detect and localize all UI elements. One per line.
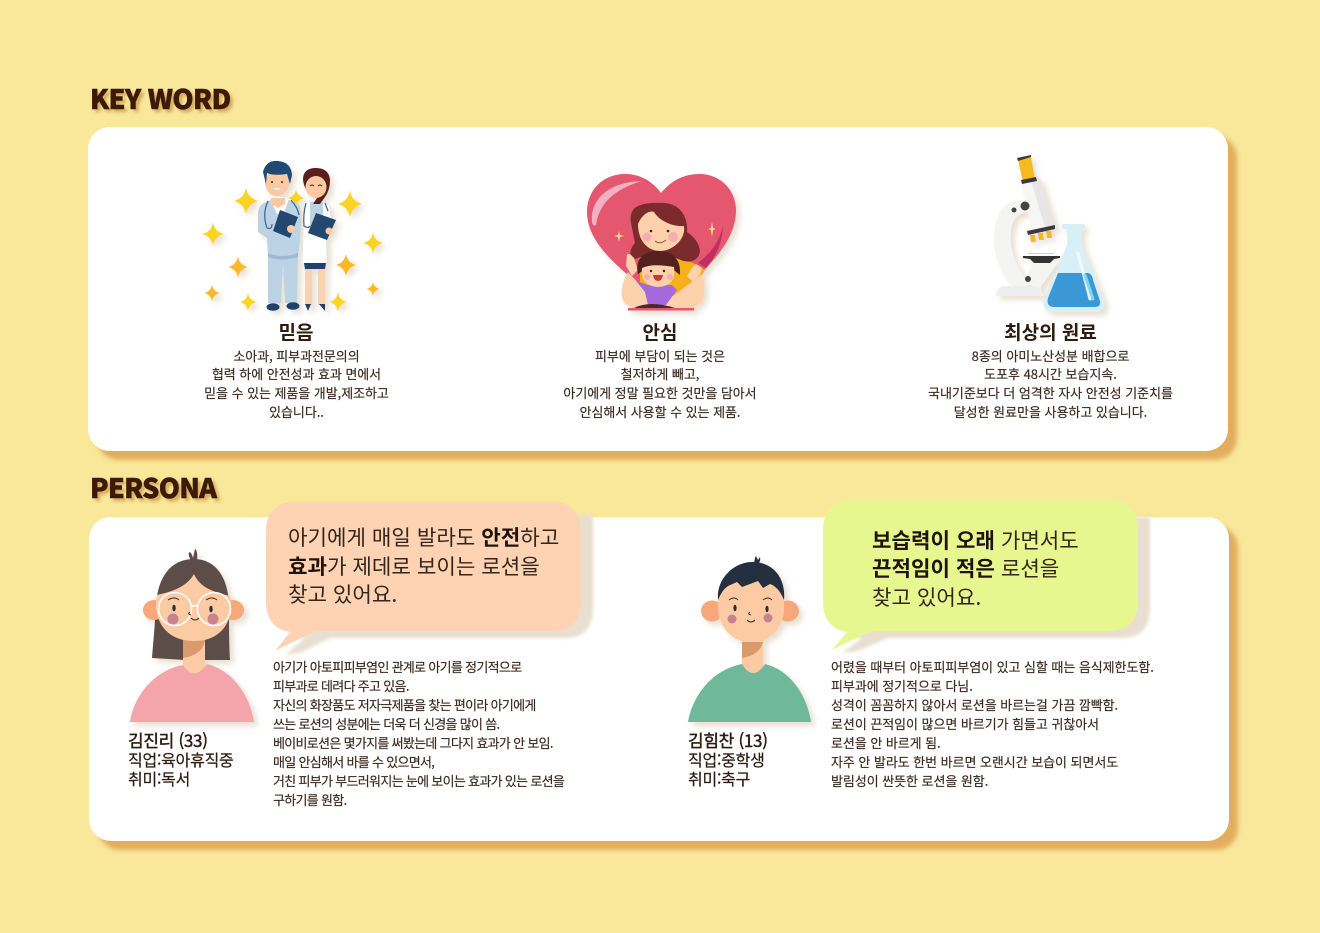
text: boy profile: 김힘찬 (13) (688, 727, 768, 752)
text: woman bubble quote (288, 521, 559, 609)
text: keyword 3 description: 달성한 원료만을 사용하고 있습니다. (954, 402, 1147, 421)
text: keyword 2 description: 안심해서 사용할 수 있는 제품. (579, 402, 741, 421)
text: boy description (831, 656, 1154, 790)
text: keyword 1 description: 소아과, 피부과전문의의 (233, 346, 360, 364)
text: boy profile: 취미:축구 (688, 766, 750, 790)
text: keyword 3 description: 8종의 아미노산성분 배합으로 (972, 346, 1129, 364)
text: keyword 2 title: 안심 (643, 318, 677, 344)
text: boy description: 로션이 끈적임이 많으면 바르기가 힘들고 귀찮아서 (831, 714, 1099, 732)
text: woman description: 구하기를 원함. (273, 790, 347, 808)
text: woman description: 베이비로션은 몇가지를 써봤는데 그다지 효과가 안 보임. (273, 732, 553, 752)
panel: persona (89, 517, 1229, 841)
text: boy profile (688, 727, 768, 790)
heading: PERSONA: PERSONA (90, 467, 216, 506)
text: boy bubble quote: 끈적임이 적은 로션을 (872, 552, 1059, 583)
text: keyword 3 description (928, 346, 1173, 421)
text: keyword 2 description: 철저하게 빼고, (621, 364, 699, 383)
text: boy bubble quote (872, 524, 1079, 612)
text: boy description: 성격이 꼼꼼하지 않아서 로션을 바르는걸 가끔 깜빡함. (831, 694, 1118, 714)
text: woman bubble quote: 효과가 제데로 보이는 로션을 (288, 550, 540, 581)
text: woman bubble quote: 아기에게 매일 발라도 안전하고 (288, 521, 559, 552)
text: woman description: 매일 안심해서 바를 수 있으면서, (273, 752, 434, 770)
text: boy description: 자주 안 발라도 한번 바르면 오랜시간 보습이 되면서도 (831, 752, 1118, 770)
text: boy bubble quote: 찾고 있어요. (872, 581, 981, 612)
text: keyword 1 description: 협력 하에 안전성과 효과 면에서 (212, 364, 381, 383)
speech bubble: boy (823, 500, 1152, 654)
text: woman description: 거친 피부가 부드러워지는 눈에 보이는 효과가 있는 로션을 (273, 770, 564, 790)
text: keyword 1 description: 있습니다.. (269, 402, 324, 421)
text: woman profile: 취미:독서 (128, 766, 190, 790)
text: woman profile: 직업:육아휴직중 (128, 747, 234, 771)
text: woman profile (128, 727, 234, 790)
text: keyword 3 description: 국내기준보다 더 엄격한 자사 안전성 기준치를 (928, 383, 1173, 402)
text: keyword 2 description: 피부에 부담이 되는 것은 (595, 346, 725, 364)
text: boy description: 피부과에 정기적으로 다님. (831, 676, 973, 694)
woman doctor (305, 264, 312, 305)
text: woman description: 쓰는 로션의 성분에는 더욱 더 신경을 많이 씀. (273, 714, 499, 732)
icon: woman avatar (130, 549, 260, 728)
text: keyword 2 description (563, 346, 757, 421)
icon: doctors with sparkles (202, 160, 386, 317)
text: woman profile: 김진리 (33) (128, 727, 208, 752)
text: boy description: 어렸을 때부터 아토피피부염이 있고 심할 때는 음식제한도함. (831, 656, 1154, 676)
text: woman bubble quote: 찾고 있어요. (288, 578, 397, 609)
heading: KEY WORD: KEY WORD (90, 78, 231, 117)
text: woman description: 아기가 아토피피부염인 관계로 아기를 정기적으로 (273, 656, 521, 676)
text: boy profile: 직업:중학생 (688, 747, 765, 771)
man doctor (258, 199, 301, 303)
text: boy description: 발림성이 싼뜻한 로션을 원함. (831, 770, 988, 790)
text: boy bubble quote: 보습력이 오래 가면서도 (872, 524, 1079, 554)
text: keyword 1 description (204, 346, 389, 421)
icon: microscope and flask (994, 155, 1110, 318)
text: keyword 3 title: 최상의 원료 (1004, 318, 1097, 344)
text: woman description: 자신의 화장품도 저자극제품을 찾는 편이라 아기에게 (273, 694, 536, 714)
text: keyword 3 description: 도포후 48시간 보습지속. (984, 364, 1117, 383)
speech bubble: woman (266, 502, 594, 656)
text: keyword 1 description: 믿을 수 있는 제품을 개발,제조하고 (204, 383, 389, 402)
text: keyword 1 title: 믿음 (279, 318, 313, 344)
panel: key words (88, 127, 1228, 451)
text: boy description: 로션을 안 바르게 됨. (831, 732, 941, 752)
text: woman description: 피부과로 데려다 주고 있음. (273, 676, 409, 694)
icon: boy avatar (688, 556, 816, 728)
text: woman description (273, 656, 564, 808)
icon: mother and child in heart (587, 174, 742, 317)
text: keyword 2 description: 아기에게 정말 필요한 것만을 담아서 (563, 383, 757, 402)
